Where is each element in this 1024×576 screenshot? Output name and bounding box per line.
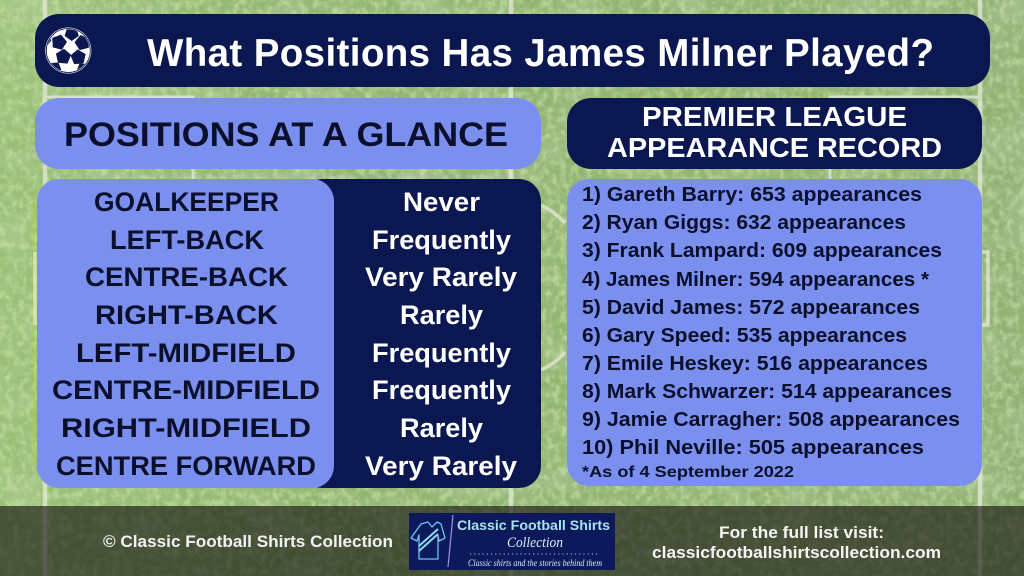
panel: appearance ranking list: 10) Phil Neville: 505 appearances bbox=[582, 437, 924, 459]
panel: appearance ranking list: 5) David James: 572 appearances bbox=[582, 297, 920, 319]
panel: appearance ranking list: 2) Ryan Giggs: 632 appearances bbox=[582, 212, 906, 234]
logo: Classic shirts and the stories behind them bbox=[468, 559, 602, 569]
position names column: RIGHT-BACK bbox=[95, 300, 279, 330]
call to action: For the full list visit: bbox=[719, 524, 884, 542]
panel: appearance ranking list: 4) James Milner: 594 appearances * bbox=[582, 269, 929, 291]
copyright text: © Classic Football Shirts Collection bbox=[103, 533, 393, 551]
heading: premier league appearance record: APPEARANCE RECORD bbox=[607, 132, 942, 163]
icon: football shirt bbox=[411, 522, 445, 559]
frequency column: Rarely bbox=[400, 413, 483, 443]
panel: appearance ranking list: 1) Gareth Barry: 653 appearances bbox=[582, 184, 922, 206]
panel: appearance ranking list: 8) Mark Schwarzer: 514 appearances bbox=[582, 381, 952, 403]
position names column bbox=[37, 179, 334, 488]
frequency column: Frequently bbox=[372, 338, 511, 368]
position names column: CENTRE-MIDFIELD bbox=[52, 375, 320, 405]
position names column: RIGHT-MIDFIELD bbox=[61, 413, 311, 443]
icon: football bbox=[45, 28, 92, 74]
heading: premier league appearance record bbox=[567, 98, 982, 169]
frequency column: Very Rarely bbox=[365, 262, 517, 292]
frequency column: Frequently bbox=[372, 375, 511, 405]
call to action bbox=[652, 524, 941, 562]
logo: Classic Football Shirts bbox=[457, 518, 610, 533]
logo bbox=[409, 513, 615, 570]
panel: appearance ranking list bbox=[567, 179, 982, 486]
position names column: CENTRE FORWARD bbox=[56, 451, 316, 481]
footer bar bbox=[0, 506, 1024, 576]
call to action: classicfootballshirtscollection.com bbox=[652, 544, 941, 562]
panel: appearance ranking list: 9) Jamie Carragher: 508 appearances bbox=[582, 409, 960, 431]
position names column: LEFT-BACK bbox=[110, 225, 265, 255]
footnote: *As of 4 September 2022 bbox=[582, 464, 794, 481]
position names column: LEFT-MIDFIELD bbox=[76, 338, 296, 368]
panel: appearance ranking list: 3) Frank Lampard: 609 appearances bbox=[582, 240, 942, 262]
frequency column: Never bbox=[403, 187, 480, 217]
title banner bbox=[35, 14, 990, 87]
frequency column bbox=[300, 179, 541, 488]
heading: positions at a glance: POSITIONS AT A GLANCE bbox=[64, 116, 508, 154]
heading: positions at a glance bbox=[35, 98, 541, 169]
panel: appearance ranking list: 7) Emile Heskey: 516 appearances bbox=[582, 353, 928, 375]
title text: What Positions Has James Milner Played? bbox=[147, 32, 934, 75]
heading: premier league appearance record: PREMIER LEAGUE bbox=[642, 101, 907, 132]
frequency column: Rarely bbox=[400, 300, 483, 330]
frequency column: Very Rarely bbox=[365, 451, 517, 481]
panel: appearance ranking list: 6) Gary Speed: 535 appearances bbox=[582, 325, 907, 347]
frequency column: Frequently bbox=[372, 225, 511, 255]
panel: positions table bbox=[37, 179, 541, 488]
logo: Collection bbox=[507, 535, 563, 551]
position names column: CENTRE-BACK bbox=[85, 262, 289, 292]
position names column: GOALKEEPER bbox=[94, 187, 279, 217]
